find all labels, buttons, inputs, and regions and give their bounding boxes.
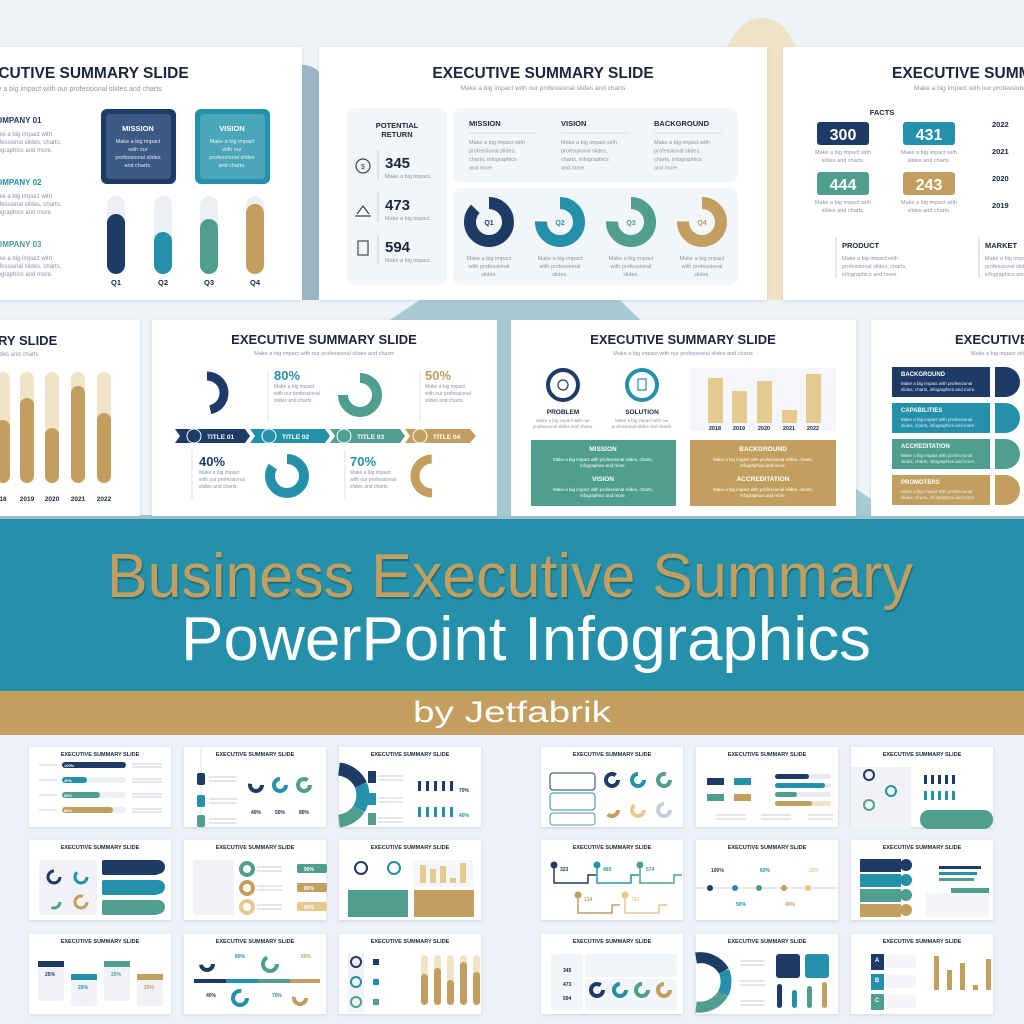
panel: quarterly donuts: Q2 xyxy=(555,220,565,227)
vision box xyxy=(195,109,270,184)
row2 slide B (timeline): Make a big impact xyxy=(199,470,240,476)
row2 slide A (cropped bars): 2021 xyxy=(71,496,86,503)
panel: mission vision background: charts, infographics xyxy=(561,157,609,163)
slide 3 (top right, cropped): professional slides, charts, xyxy=(842,264,907,270)
thumbnail grid right xyxy=(541,747,993,1014)
thumb L8 xyxy=(184,934,326,1014)
facts boxes: slides and charts. xyxy=(908,208,951,214)
panel: mission vision background: VISION xyxy=(561,119,586,128)
vision box: VISION xyxy=(219,124,245,133)
row2 slide D (cropped list): BACKGROUND xyxy=(901,372,946,378)
row2 slide A (cropped bars) xyxy=(0,320,140,516)
facts boxes: Make a big impact with xyxy=(901,150,957,156)
thumb R4: 323 xyxy=(560,867,569,873)
row2 slide D (cropped list): slides, charts, infographics and more. xyxy=(901,387,976,392)
thumb R8 xyxy=(696,934,838,1014)
row2 slide B (timeline): with our professional xyxy=(425,391,471,397)
slide 2 (top center) xyxy=(319,47,767,300)
row2 slide D (cropped list): CAPABILITIES xyxy=(901,408,942,414)
facts boxes: slides and charts. xyxy=(822,158,865,164)
row2 slide D (cropped list): Make a big impact with professional xyxy=(901,453,972,458)
thumb L7 xyxy=(29,934,171,1014)
facts boxes: Make a big impact with xyxy=(815,150,871,156)
panel: potential return: Make a big impact. xyxy=(385,216,432,222)
slide 3 (top right, cropped): 2019 xyxy=(992,201,1009,210)
row2 slide B (timeline): slides and charts. xyxy=(350,484,389,490)
thumb L8: 50% xyxy=(301,954,312,960)
thumb L1: EXECUTIVE SUMMARY SLIDE xyxy=(61,752,140,758)
thumb R5: 100% xyxy=(711,868,724,874)
thumb R5: 50% xyxy=(736,902,747,908)
panel: quarterly donuts: Q3 xyxy=(626,220,636,227)
slide 3 (top right, cropped) xyxy=(783,47,1024,300)
timeline arrow: TITLE 03 xyxy=(357,434,384,441)
thumb L4: EXECUTIVE SUMMARY SLIDE xyxy=(61,845,140,851)
row2 slide C (problem solution): Make a big impact with professional slides, charts, xyxy=(713,457,813,462)
slide 2 (top center): EXECUTIVE SUMMARY SLIDE xyxy=(432,65,654,82)
panel: quarterly donuts: slides. xyxy=(694,272,710,278)
panel: mission vision background: MISSION xyxy=(469,119,501,128)
thumb L5 xyxy=(184,840,327,920)
panel: quarterly donuts: with professional xyxy=(468,264,509,270)
timeline arrow: TITLE 01 xyxy=(207,434,234,441)
slide 3 (top right, cropped): FACTS xyxy=(870,108,894,117)
row2 slide A (cropped bars): 2019 xyxy=(20,496,35,503)
row2 slide C (problem solution): infographics and more. xyxy=(580,493,626,498)
bar chart Q1-Q4: Q1 xyxy=(111,278,121,287)
thumb R7 xyxy=(541,934,683,1014)
vision box: and charts. xyxy=(218,163,246,169)
thumb R3: EXECUTIVE SUMMARY SLIDE xyxy=(883,752,962,758)
bar chart: 2019 xyxy=(733,426,745,432)
row2 slide B (timeline): with our professional xyxy=(350,477,396,483)
row2 slide B (timeline): slides and charts. xyxy=(274,398,313,404)
bar chart xyxy=(690,368,836,432)
row2 slide A (cropped bars): 2022 xyxy=(97,496,112,503)
panel: mission vision background xyxy=(453,108,738,182)
thumb L2 xyxy=(184,747,326,827)
panel: mission vision background: professional slides, xyxy=(654,148,701,154)
thumb L3: 70% xyxy=(459,788,470,794)
thumb L2: 80% xyxy=(299,810,310,816)
thumb L5: 90% xyxy=(304,867,315,873)
mission box: professional slides xyxy=(115,155,161,161)
panel: potential return: Make a big impact. xyxy=(385,174,432,180)
row2 slide D (cropped list): Make a big impact with professional xyxy=(901,417,972,422)
background xyxy=(0,0,1024,520)
panel: potential return: RETURN xyxy=(381,130,413,139)
thumb L7: 25% xyxy=(78,985,89,991)
slide 3 (top right, cropped): infographics and more. xyxy=(842,272,898,278)
slide 3 (top right, cropped): 2020 xyxy=(992,174,1009,183)
thumb R7: 345 xyxy=(563,968,572,974)
thumb L7: 25% xyxy=(144,985,155,991)
row2 slide B (timeline): 40% xyxy=(199,454,225,469)
vision box: with our xyxy=(221,147,242,153)
thumb L4 xyxy=(29,840,171,920)
panel: quarterly donuts: Make a big impact xyxy=(680,256,725,262)
panel: potential return: Make a big impact. xyxy=(385,258,432,264)
thumb L8: 40% xyxy=(206,993,217,999)
panel: quarterly donuts: with professional xyxy=(610,264,651,270)
facts boxes: slides and charts. xyxy=(822,208,865,214)
row2 slide C (problem solution): Make a big impact with our xyxy=(536,418,590,423)
facts boxes: 243 xyxy=(916,177,942,194)
banner xyxy=(0,519,1024,691)
slide 3 (top right, cropped): 2021 xyxy=(992,147,1009,156)
thumb R2: EXECUTIVE SUMMARY SLIDE xyxy=(728,752,807,758)
panel: quarterly donuts: slides. xyxy=(623,272,639,278)
bar chart Q1-Q4: Q2 xyxy=(158,278,168,287)
thumb L5: 60% xyxy=(304,905,315,911)
bar chart: 2020 xyxy=(758,426,770,432)
thumb L9: EXECUTIVE SUMMARY SLIDE xyxy=(371,939,450,945)
bar chart: 2021 xyxy=(783,426,795,432)
panel: quarterly donuts: Q4 xyxy=(697,220,707,227)
thumb R7: 473 xyxy=(563,982,572,988)
row2 slide D (cropped list): PROMOTERS xyxy=(901,480,940,486)
mission box: MISSION xyxy=(122,124,154,133)
panel: mission vision background: professional slides, xyxy=(561,148,608,154)
thumb L1: 80% xyxy=(64,808,72,813)
row2 slide C (problem solution): infographics and more. xyxy=(740,493,786,498)
thumb L3: EXECUTIVE SUMMARY SLIDE xyxy=(371,752,450,758)
row2 slide C (problem solution): Make a big impact with professional slides, charts, xyxy=(553,487,653,492)
row2 slide D (cropped list): slides, charts, infographics and more. xyxy=(901,495,976,500)
panel: mission vision background: BACKGROUND xyxy=(654,119,710,128)
panel: quarterly donuts: Make a big impact xyxy=(538,256,583,262)
thumb L8: EXECUTIVE SUMMARY SLIDE xyxy=(216,939,295,945)
thumb R3 xyxy=(851,747,993,829)
decorative shapes xyxy=(0,18,1024,520)
panel: quarterly donuts xyxy=(453,188,738,285)
author band: by Jetfabrik xyxy=(413,696,612,729)
thumb L2: EXECUTIVE SUMMARY SLIDE xyxy=(216,752,295,758)
banner: PowerPoint Infographics xyxy=(181,605,871,674)
thumb R4 xyxy=(541,840,683,920)
panel: mission vision background: and more. xyxy=(561,166,586,172)
thumb L2: 50% xyxy=(275,810,286,816)
row2 slide D (cropped list): Make a big impact with professional xyxy=(901,381,972,386)
row2 slide C (problem solution): infographics and more. xyxy=(580,463,626,468)
row2 slide D (cropped list) xyxy=(871,320,1024,516)
row2 slide A (cropped bars): 2020 xyxy=(45,496,60,503)
row2 slide B (timeline): EXECUTIVE SUMMARY SLIDE xyxy=(231,332,417,347)
row2 slide C (problem solution): professional slides and charts. xyxy=(612,424,672,429)
thumb L7: 25% xyxy=(45,972,56,978)
row2 slide C (problem solution): Make a big impact with our professional slides and charts xyxy=(613,351,753,357)
thumb R4: 493 xyxy=(603,867,612,873)
thumb R7: EXECUTIVE SUMMARY SLIDE xyxy=(573,939,652,945)
thumb R9 xyxy=(851,934,993,1014)
panel: quarterly donuts: Make a big impact xyxy=(609,256,654,262)
bar chart Q1-Q4: Q4 xyxy=(250,278,261,287)
row2 slide C (problem solution): BACKGROUND xyxy=(739,446,787,453)
row2 slide C (problem solution): VISION xyxy=(592,476,614,483)
thumb L1 xyxy=(29,747,171,827)
thumb R4: EXECUTIVE SUMMARY SLIDE xyxy=(573,845,652,851)
panel: quarterly donuts: Make a big impact xyxy=(467,256,512,262)
thumbnail grid left xyxy=(29,747,481,1014)
panel: potential return: 473 xyxy=(385,197,410,214)
slide 2 (top center): Make a big impact with our professional slides and charts xyxy=(461,85,626,92)
thumb R1: EXECUTIVE SUMMARY SLIDE xyxy=(573,752,652,758)
row2 slide C (problem solution): Make a big impact with our xyxy=(615,418,669,423)
facts boxes: 431 xyxy=(916,127,942,144)
row2 slide D (cropped list): slides, charts, infographics and more. xyxy=(901,423,976,428)
facts boxes: Make a big impact with xyxy=(901,200,957,206)
thumb L5: 80% xyxy=(304,886,315,892)
thumb R4: 574 xyxy=(646,867,655,873)
row2 slide D (cropped list): ACCREDITATION xyxy=(901,444,950,450)
thumb L9 xyxy=(339,934,481,1014)
thumb R5 xyxy=(696,840,838,920)
panel: mission vision background: and more. xyxy=(654,166,679,172)
row2 slide B (timeline) xyxy=(152,320,497,516)
bar chart Q1-Q4 xyxy=(107,196,264,287)
panel: potential return xyxy=(347,108,447,285)
thumb R6 xyxy=(851,840,993,920)
mission box xyxy=(101,109,176,184)
facts boxes xyxy=(815,122,957,214)
row2 slide C (problem solution) xyxy=(511,320,856,516)
bar chart: 2018 xyxy=(709,426,721,432)
row2 slide B (timeline): slides and charts. xyxy=(199,484,238,490)
thumb R1 xyxy=(541,747,683,827)
thumb L1: 60% xyxy=(64,793,72,798)
thumb L2: 40% xyxy=(251,810,262,816)
panel: mission vision background: and more. xyxy=(469,166,494,172)
row2 slide B (timeline): Make a big impact xyxy=(350,470,391,476)
panel: potential return: 345 xyxy=(385,155,410,172)
thumb R9: A xyxy=(875,958,880,964)
slide 1 (top left, cropped) xyxy=(0,47,302,300)
thumb R5: 20% xyxy=(809,868,820,874)
bar chart Q1-Q4: Q3 xyxy=(204,278,214,287)
thumb L8: 70% xyxy=(272,993,283,999)
row2 slide D (cropped list): Make a big impact with professional xyxy=(901,489,972,494)
panel: quarterly donuts: Q1 xyxy=(484,220,494,227)
row2 slide B (timeline): with our professional xyxy=(199,477,245,483)
thumb L6 xyxy=(339,840,481,920)
thumb R4: 134 xyxy=(584,897,593,903)
panel: potential return: POTENTIAL xyxy=(376,121,419,130)
row2 slide C (problem solution): PROBLEM xyxy=(547,409,579,416)
panel: quarterly donuts: with professional xyxy=(539,264,580,270)
thumb L5: EXECUTIVE SUMMARY SLIDE xyxy=(216,845,295,851)
row2 slide B (timeline): with our professional xyxy=(274,391,320,397)
mission box: Make a big impact xyxy=(116,139,161,145)
thumb R9: EXECUTIVE SUMMARY SLIDE xyxy=(883,939,962,945)
slide 3 (top right, cropped): Make a big impact with xyxy=(842,256,898,262)
timeline arrow: TITLE 02 xyxy=(282,434,309,441)
thumb R9: C xyxy=(875,998,880,1004)
thumb L1: 40% xyxy=(64,778,72,783)
facts boxes: 300 xyxy=(830,127,856,144)
panel: mission vision background: professional slides, xyxy=(469,148,516,154)
row2 slide B (timeline): Make a big impact xyxy=(425,384,466,390)
row2 slide C (problem solution): professional slides and charts. xyxy=(533,424,593,429)
facts boxes: Make a big impact with xyxy=(815,200,871,206)
facts boxes: slides and charts. xyxy=(908,158,951,164)
slide 3 (top right, cropped): PRODUCT xyxy=(842,241,880,250)
panel: quarterly donuts: with professional xyxy=(681,264,722,270)
row2 slide C (problem solution): MISSION xyxy=(589,446,617,453)
thumb R2 xyxy=(696,747,838,827)
thumb R6: EXECUTIVE SUMMARY SLIDE xyxy=(883,845,962,851)
timeline arrow: TITLE 04 xyxy=(433,434,460,441)
author band xyxy=(0,691,1024,735)
row2 slide C (problem solution): Make a big impact with professional slides, charts, xyxy=(553,457,653,462)
panel: mission vision background: Make a big impact with xyxy=(654,140,710,146)
row2 slide B (timeline): slides and charts. xyxy=(425,398,464,404)
panel: mission vision background: Make a big impact with xyxy=(469,140,525,146)
mission box: with our xyxy=(127,147,148,153)
row2 slide D (cropped list): slides, charts, infographics and more. xyxy=(901,459,976,464)
panel: quarterly donuts: slides. xyxy=(481,272,497,278)
row2 slide C (problem solution): Make a big impact with professional slides, charts, xyxy=(713,487,813,492)
row2 slide C (problem solution): ACCREDITATION xyxy=(737,476,790,483)
banner: Business Executive Summary xyxy=(107,542,913,611)
thumb L3: 40% xyxy=(459,813,470,819)
thumb L7: EXECUTIVE SUMMARY SLIDE xyxy=(61,939,140,945)
thumb R5: 40% xyxy=(785,902,796,908)
row2 slide B (timeline): Make a big impact xyxy=(274,384,315,390)
thumb L7: 25% xyxy=(111,972,122,978)
thumb R8: EXECUTIVE SUMMARY SLIDE xyxy=(728,939,807,945)
thumb R5: 60% xyxy=(760,868,771,874)
thumb L6: EXECUTIVE SUMMARY SLIDE xyxy=(371,845,450,851)
thumb R5: EXECUTIVE SUMMARY SLIDE xyxy=(728,845,807,851)
row2 slide C (problem solution): infographics and more. xyxy=(740,463,786,468)
thumb R9: B xyxy=(875,978,880,984)
panel: mission vision background: Make a big impact with xyxy=(561,140,617,146)
panel: potential return: $ xyxy=(361,164,365,171)
thumb R7: 594 xyxy=(563,996,572,1002)
thumb L1: 100% xyxy=(64,763,75,768)
mission box: and charts. xyxy=(124,163,152,169)
thumb L3 xyxy=(339,747,481,827)
vision box: Make a big impact xyxy=(210,139,255,145)
panel: mission vision background: charts, infographics xyxy=(654,157,702,163)
row2 slide B (timeline): 70% xyxy=(350,454,376,469)
panel: quarterly donuts: slides. xyxy=(552,272,568,278)
panel: mission vision background: charts, infographics xyxy=(469,157,517,163)
vision box: professional slides xyxy=(209,155,255,161)
row2 slide B (timeline): 80% xyxy=(274,368,300,383)
slide 3 (top right, cropped): MARKET xyxy=(985,241,1017,250)
thumb R4: 754 xyxy=(631,897,640,903)
row2 slide C (problem solution): EXECUTIVE SUMMARY SLIDE xyxy=(590,332,776,347)
panel: potential return: 594 xyxy=(385,239,411,256)
timeline arrow xyxy=(175,429,476,443)
slide 3 (top right, cropped): 2022 xyxy=(992,120,1009,129)
bar chart: 2022 xyxy=(807,426,819,432)
row2 slide B (timeline): Make a big impact with our professional slides and charts xyxy=(254,351,394,357)
row2 slide B (timeline): 50% xyxy=(425,368,451,383)
facts boxes: 444 xyxy=(830,177,856,194)
row2 slide C (problem solution): SOLUTION xyxy=(625,409,659,416)
thumb L8: 80% xyxy=(235,954,246,960)
